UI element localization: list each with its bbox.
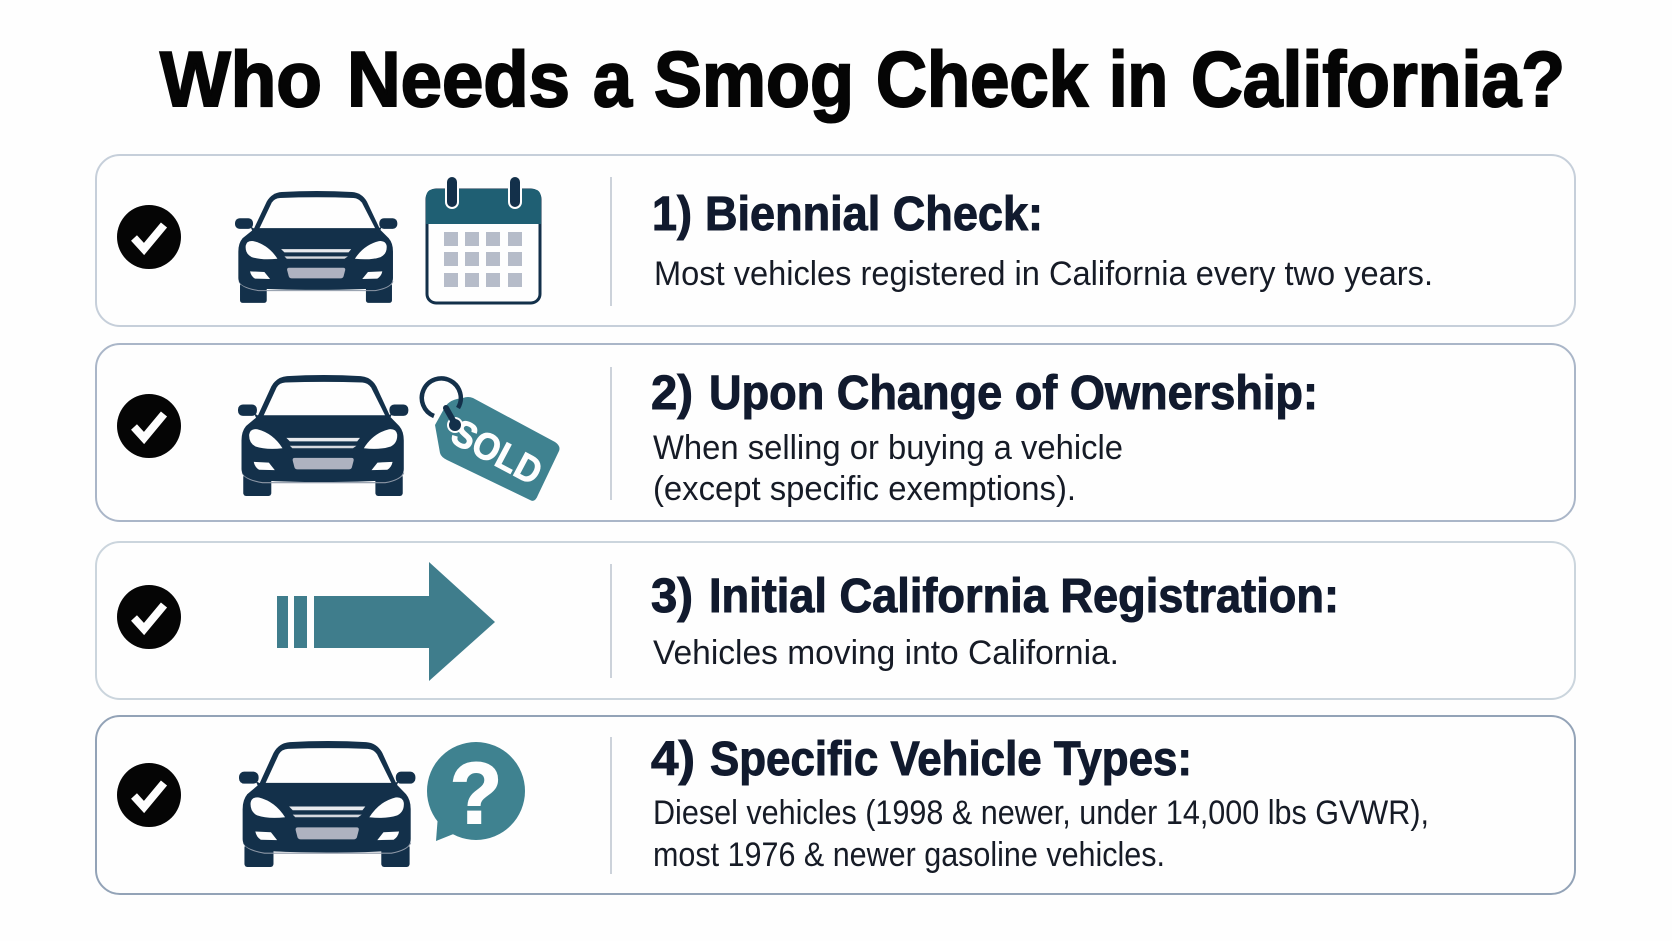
icon: check mark <box>117 763 181 827</box>
text: change of ownership description: (except specific exemptions). <box>653 470 1076 508</box>
icon: sold tag <box>422 378 560 501</box>
icon: check mark <box>117 394 181 458</box>
text: change of ownership description <box>653 429 1123 508</box>
panel: biennial check <box>96 155 1575 326</box>
title <box>160 35 1565 123</box>
icon: arrow <box>277 562 495 681</box>
heading: biennial check: Biennial Check: <box>705 188 1043 241</box>
title: Smog <box>654 35 854 123</box>
text: specific vehicle types description: most 1976 & newer gasoline vehicles. <box>653 836 1165 874</box>
title: a <box>593 35 633 123</box>
heading: change of ownership: 2) <box>651 367 693 420</box>
heading: change of ownership: Upon Change of Ownership: <box>709 367 1318 420</box>
text: specific vehicle types description: Diesel vehicles (1998 & newer, under 14,000 lbs GVWR), <box>653 794 1429 832</box>
title: California? <box>1191 35 1565 123</box>
icon: check mark <box>117 205 181 269</box>
title: Who <box>160 35 322 123</box>
panel: specific vehicle types <box>96 716 1575 894</box>
icon: question bubble: ? <box>450 746 502 842</box>
title: Check <box>876 35 1089 123</box>
icon: car <box>238 375 408 496</box>
heading: specific vehicle types: 4) <box>651 733 695 786</box>
heading: initial registration: Initial California Registration: <box>709 570 1339 623</box>
panel: initial registration <box>96 542 1575 699</box>
heading: biennial check: 1) <box>652 188 692 241</box>
panel: change of ownership <box>96 344 1575 521</box>
icon: car <box>235 191 397 303</box>
heading: specific vehicle types: Specific Vehicle Types: <box>710 733 1192 786</box>
icon: check mark <box>117 585 181 649</box>
icon: sold tag: SOLD <box>444 412 549 494</box>
icon: calendar <box>426 176 541 303</box>
text: initial registration description: Vehicles moving into California. <box>653 634 1119 672</box>
text: change of ownership description: When selling or buying a vehicle <box>653 429 1123 467</box>
icon: car <box>239 741 415 867</box>
title: Needs <box>347 35 570 123</box>
title: in <box>1109 35 1168 123</box>
text: specific vehicle types description <box>653 794 1429 874</box>
heading: initial registration: 3) <box>651 570 693 623</box>
icon: question bubble <box>427 742 525 842</box>
text: biennial check description: Most vehicles registered in California every two years. <box>654 255 1433 293</box>
